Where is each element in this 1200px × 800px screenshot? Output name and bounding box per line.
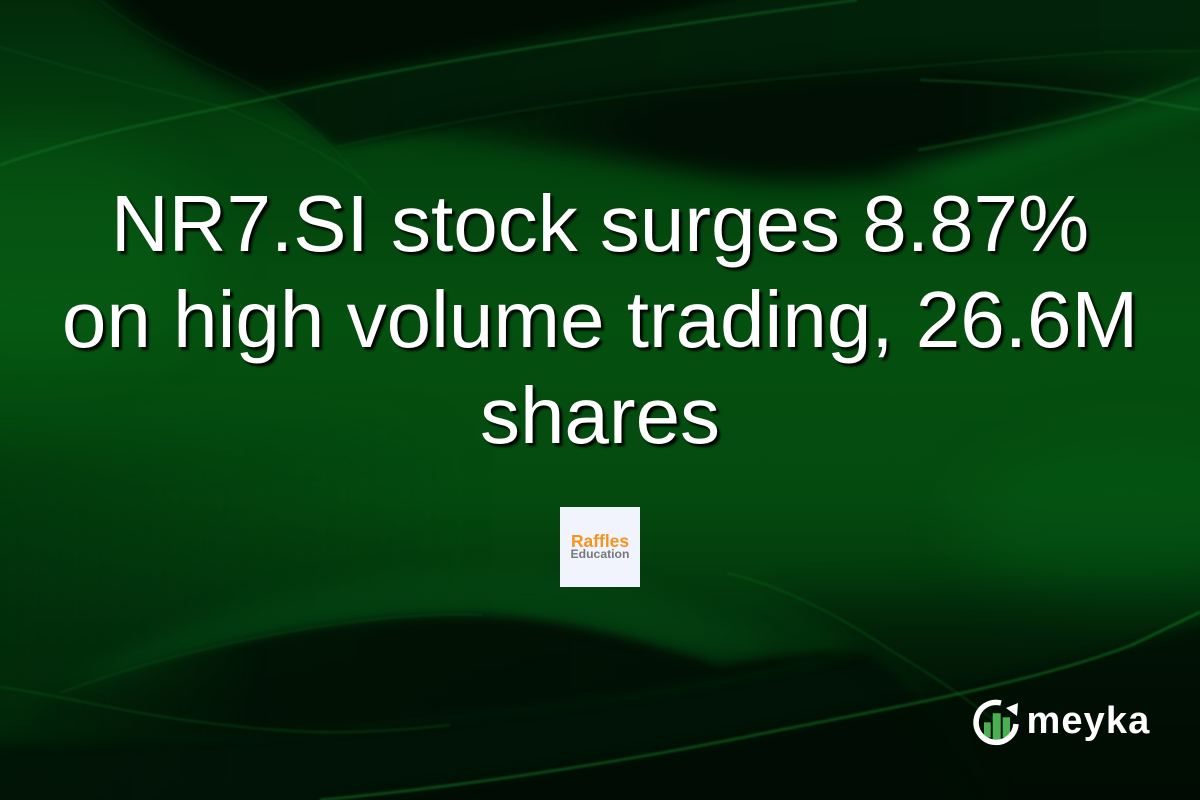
brand: meyka logo <box>973 700 1150 746</box>
dark lens top <box>400 59 1200 182</box>
icon: circular arrow with bars <box>973 700 1019 746</box>
logo: Raffles Education: Raffles <box>571 531 629 551</box>
title <box>62 179 1138 460</box>
title: NR7.SI stock surges 8.87% <box>111 179 1089 268</box>
logo: Raffles Education: Education <box>571 547 629 561</box>
wordmark: meyka <box>1026 700 1150 742</box>
right glow <box>960 440 1200 600</box>
dark lower band <box>0 652 1010 800</box>
logo: Raffles Education <box>560 507 640 587</box>
dark bottom lens <box>0 614 865 747</box>
left glow <box>0 140 210 360</box>
title: shares <box>480 371 720 460</box>
very dark under bottom streak <box>320 612 1200 800</box>
bright ribbon top right <box>880 72 1200 185</box>
dark top corner <box>80 0 857 97</box>
dark band between top streaks <box>272 0 1200 147</box>
lighter green ribbon above bottom lens <box>60 569 780 693</box>
right bottom fade <box>765 560 1200 800</box>
title: on high volume trading, 26.6M <box>62 275 1138 364</box>
left lower shade <box>0 440 460 700</box>
